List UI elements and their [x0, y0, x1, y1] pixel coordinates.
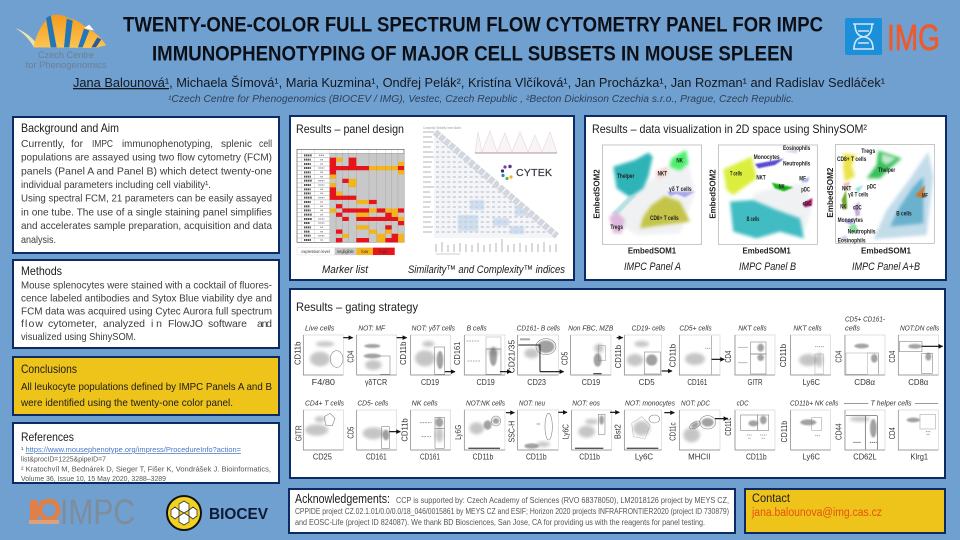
heading: background and aim: Background and Aim — [21, 121, 119, 135]
text: background: cell — [259, 138, 272, 150]
plot: NOT NK cells: Ly6G — [453, 425, 463, 440]
chart: IMPC Panel B: NK — [779, 184, 785, 191]
plot: CD4+ T cells: GITR — [293, 425, 303, 441]
chart: IMPC Panel B: Eosinophils — [783, 145, 811, 152]
logo: IMPC — [29, 493, 135, 532]
plot: NOT pDC: CD11c — [667, 422, 677, 441]
arrows: gating left half — [343, 338, 623, 432]
plot: NKT cells GITR: CD4 — [723, 350, 733, 363]
plot: cDC — [723, 399, 775, 462]
text: background: splenic — [221, 138, 252, 150]
text: background: for — [71, 138, 83, 150]
text: acknowledgements: and EOSC-Life (project ID 824087). We thank BD Biosciences, San Jose, CA for providing us with the reagents for panel testing. — [295, 518, 705, 527]
plot: NOT neu: NOT: neu — [519, 399, 545, 408]
text: background: analysis. — [21, 234, 56, 246]
plot: NOT monocytes — [613, 399, 675, 462]
plot: NOT eos: NOT: eos — [572, 399, 600, 408]
logo: Czech Centre for Phenogenomics: for Phenogenomics — [26, 60, 107, 70]
logo: Cytek: CYTEK — [516, 167, 552, 179]
plot: cDC: cDC — [737, 399, 749, 408]
plot: CD11b+ NK cells — [779, 399, 839, 462]
spectrum plot — [475, 131, 557, 153]
chart: IMPC Panel A+B: CD8+ T cells — [837, 156, 867, 163]
text: references: ² Kratochvíl M, Bednárek D, Sieger T, Fišer K, Vondrášek J. Bioinformatics, — [21, 464, 271, 474]
panel: conclusions — [13, 357, 279, 415]
plot: NKT cells Ly6C: CD11b — [778, 344, 788, 367]
panel: methods — [13, 260, 279, 348]
chart: IMPC Panel A+B — [836, 144, 934, 245]
heading: references: References — [21, 430, 74, 444]
heading: data visualization: Results – data visualization in 2D space using ShinySOM² — [592, 122, 867, 136]
panel: results gating strategy — [290, 289, 945, 478]
chart: IMPC Panel A+B: pDC — [867, 184, 877, 191]
axis labels: EmbedSOM: EmbedSOM1 — [742, 246, 791, 256]
plot: CD5- cells — [345, 399, 397, 462]
heading: contact: Contact — [752, 491, 791, 505]
plot: CD161- B cells: CD161- B cells — [517, 323, 560, 332]
plot: CD5+ CD161- cells: CD8α — [854, 377, 875, 387]
chart: IMPC Panel A+B: Eosinophils — [838, 238, 866, 245]
plot: NOT NK cells: NOT:NK cells — [466, 399, 505, 408]
plot: NK cells: CD11b — [400, 418, 410, 442]
plot: NOT monocytes: Ly6C — [635, 452, 653, 462]
plot: NOT gd T — [398, 323, 455, 387]
plot: CD5+ CD161- cells — [834, 315, 885, 387]
table legend: high — [379, 249, 388, 254]
plot: NOT DN cells: CD8α — [908, 377, 928, 387]
caption: marker list: Marker list — [322, 264, 369, 276]
axis labels: EmbedSOM: EmbedSOM2 — [708, 169, 718, 219]
plot: CD4+ T cells: CD4+ T cells — [305, 399, 344, 408]
text: methods: in — [151, 318, 162, 330]
panel: acknowledgements — [289, 489, 735, 533]
chart: IMPC Panel A+B: Thelper — [878, 167, 896, 174]
plot: CD4+ T cells: CD25 — [313, 452, 332, 462]
plot: NOT DN cells: CD4 — [887, 350, 897, 363]
plot: NOT eos — [560, 399, 612, 462]
plot: CD161- B cells — [506, 323, 560, 387]
text: methods: and — [257, 318, 272, 330]
axis labels: EmbedSOM: EmbedSOM1 — [861, 245, 911, 255]
text: background: immunophenotyping, — [122, 138, 213, 150]
panel: references — [13, 423, 279, 483]
plot: CD161- B cells: CD23 — [527, 377, 546, 387]
plot: CD11b+ NK cells: Ly6C — [803, 452, 820, 462]
caption: IMPC Panel A: IMPC Panel A — [624, 261, 681, 273]
title: TWENTY-ONE-COLOR FULL SPECTRUM FLOW CYTOMETRY PANEL FOR IMPC — [123, 14, 823, 36]
text: acknowledgements: CPPIDE project CZ.02.1.01/0.0/0.0/18_046/0015861 by MEYS CZ and ESIF; Horizon 2020 projects INFRAFRONTIER2020 (project ID 730879) — [295, 507, 729, 516]
heading: conclusions: Conclusions — [21, 362, 77, 376]
plot: cDC: CD11b — [746, 452, 767, 462]
chart: IMPC Panel B — [718, 145, 817, 244]
plot: NOT MF: γδTCR — [365, 377, 387, 387]
chart: IMPC Panel A: Thelper — [617, 173, 635, 180]
authors: Jana Balounová¹, Michaela Šímová¹, Maria Kuzmina¹, Ondřej Pelák², Kristína Vlčíková¹, Jan Procházka¹, Jan Rozman¹ and Radislav Sedláček¹ — [73, 75, 886, 90]
chart: IMPC Panel A: CD8+ T cells — [650, 215, 679, 222]
chart: IMPC Panel A+B: MF — [922, 193, 928, 200]
plot: CD4 vs Klrg1: CD4 — [887, 427, 897, 439]
text: background: populations are assayed using two flow cytometry (FCM) — [21, 152, 272, 164]
chart: marker list table — [297, 149, 404, 255]
plot: CD5+ cells: CD11b — [668, 344, 678, 367]
plot: CD19- cells: CD5 — [639, 377, 655, 387]
text: conclusions: All leukocyte populations defined by IMPC Panels A and B — [21, 381, 272, 393]
plot: NOT DN cells — [887, 323, 940, 387]
plot: NOT NK cells: CD11b — [473, 452, 494, 462]
chart: IMPC Panel A: Tregs — [610, 224, 623, 231]
axis labels: EmbedSOM: EmbedSOM2 — [592, 169, 602, 219]
heading: gating strategy: Results – gating strategy — [296, 300, 418, 314]
plot: NOT neu: CD11b — [526, 452, 547, 462]
logo: Czech Centre for Phenogenomics — [15, 15, 107, 70]
chart: IMPC Panel A+B: Neutrophils — [848, 228, 876, 235]
chart: IMPC Panel B: NKT — [756, 174, 766, 181]
panel: background and aim — [13, 117, 279, 253]
plot: B cells: B cells — [467, 323, 487, 332]
caption: IMPC Panel A+B: IMPC Panel A+B — [852, 261, 920, 273]
plot: NOT monocytes: Bst2 — [613, 424, 623, 439]
plot: NKT cells Ly6C — [778, 323, 831, 387]
heading: panel design: Results – panel design — [296, 122, 404, 136]
text: methods: flow — [21, 318, 43, 330]
text: background: in one tube. The use of a single staining panel simplifies — [21, 206, 272, 218]
text: contact email: jana.balounova@img.cas.cz — [751, 507, 882, 519]
caption: similarity and complexity: Similarity™ and Complexity™ indices — [408, 264, 565, 276]
plot: NK cells: CD161 — [420, 452, 440, 462]
plot: NOT eos: Ly6C — [560, 424, 570, 439]
plot: CD5+ cells: CD5+ cells — [679, 323, 712, 332]
plot: CD19- cells — [613, 323, 665, 387]
plot: NOT DN cells: NOT:DN cells — [900, 323, 940, 332]
text: background: Using spectral FCM, 21 parameters can be easily assayed — [21, 192, 272, 204]
table legend: low — [361, 249, 369, 254]
text: conclusions — [20, 381, 272, 409]
plot: CD19- cells: CD19- cells — [632, 323, 665, 332]
plot: NKT cells Ly6C: NKT cells — [793, 323, 822, 332]
heading: methods: Methods — [21, 264, 62, 278]
plot: CD44 vs CD62L — [834, 410, 885, 462]
logo: IMG: IMG — [887, 17, 940, 58]
plot: Non FBC MZB: CD19 — [582, 377, 600, 387]
chart: IMPC Panel B: pDC — [801, 186, 810, 193]
chart: IMPC Panel A+B: Monocytes — [838, 217, 863, 224]
plot: CD44 vs CD62L: CD44 — [834, 423, 844, 440]
plot: NOT monocytes: NOT: monocytes — [625, 399, 675, 408]
axis labels: EmbedSOM — [592, 167, 911, 256]
chart: IMPC Panel A+B: γδ T cells — [848, 191, 869, 198]
chart: IMPC Panel A: γδ T cells — [669, 186, 692, 193]
plot: NKT cells Ly6C: Ly6C — [803, 377, 820, 387]
title: IMMUNOPHENOTYPING OF MAJOR CELL SUBSETS IN MOUSE SPLEEN — [152, 42, 793, 66]
plot: NKT cells GITR: GITR — [747, 377, 762, 387]
plot: B cells: CD19 — [476, 377, 495, 387]
plot: CD5+ CD161- cells: CD5+ CD161- — [845, 315, 885, 324]
plot: NOT eos: CD11b — [579, 452, 600, 462]
logo: BIOCEV — [167, 496, 268, 530]
plot: B cells: CD161 — [452, 341, 462, 365]
text: references — [21, 445, 271, 483]
plot: CD44 vs CD62L: CD62L — [853, 452, 877, 462]
chart: IMPC Panel A+B: NK — [840, 204, 847, 211]
chart: IMPC Panel B: T cells — [730, 171, 742, 178]
plot: CD5- cells: CD5- cells — [357, 399, 389, 408]
text: methods: software — [208, 318, 247, 330]
text: acknowledgements — [295, 496, 729, 527]
affiliations: ¹Czech Centre for Phenogenomics (BIOCEV / IMG), Vestec, Czech Republic , ²Becton Dickinson Czechia s.r.o., Prague, Czech Republic. — [168, 94, 794, 105]
axis labels: EmbedSOM: EmbedSOM2 — [825, 167, 835, 218]
logo: IMPC: IMPC — [60, 493, 135, 532]
plot: CD5+ CD161- cells: CD4 — [834, 350, 844, 363]
heading: acknowledgements: Acknowledgements: — [295, 491, 390, 506]
chart: IMPC Panel A — [602, 145, 702, 244]
table legend: negligible — [337, 249, 354, 254]
chart: IMPC Panel A: NK — [676, 157, 683, 164]
text: background: panels (Panel A and Panel B) which detect twenty-one — [21, 166, 272, 178]
gating plots right half — [613, 315, 943, 462]
caption: IMPC Panel B: IMPC Panel B — [739, 261, 796, 273]
chart: IMPC Panel A+B: cDC — [853, 205, 862, 212]
logo: BIOCEV: BIOCEV — [209, 506, 268, 523]
table legend: expression level — [301, 249, 330, 254]
chart: similarity and complexity matrix: Complexity Similarity Index Matrix — [423, 126, 461, 130]
text: background: Currently, — [21, 138, 65, 150]
plot: Non FBC MZB — [560, 323, 613, 387]
label: T helper cells: T helper cells — [871, 399, 912, 408]
plot: NOT MF: CD4 — [345, 350, 355, 363]
text: references: list&procID=1225&pipeID=7 — [21, 454, 106, 464]
logo: IMG — [845, 17, 940, 58]
chart: IMPC Panel B: Monocytes — [754, 154, 780, 161]
text: methods: cytometer, — [48, 318, 97, 330]
text: background: and accelerates sample preparation, acquisition and data — [21, 220, 272, 232]
text: background — [21, 138, 272, 246]
plot: CD5- cells: CD161 — [366, 452, 387, 462]
chart: IMPC Panel B: MF — [799, 175, 806, 182]
panel: results panel design — [290, 116, 574, 280]
plot: CD5+ CD161- cells: cells — [845, 323, 860, 332]
plot: CD4+ T cells — [293, 399, 344, 462]
chart: IMPC Panel B: B cells — [747, 216, 760, 223]
logo: Czech Centre for Phenogenomics: Czech Centre — [38, 50, 94, 60]
axis labels: EmbedSOM: EmbedSOM1 — [628, 246, 676, 256]
plot: NOT NK cells — [453, 399, 505, 462]
plot: live cells: F4/80 — [312, 377, 335, 387]
plot: CD11b+ NK cells: CD11b — [779, 421, 789, 442]
text: methods: Mouse splenocytes were stained with a cocktail of fluores- — [21, 280, 272, 292]
panel: results data visualization — [585, 116, 946, 280]
text: background: IMPC — [92, 138, 113, 150]
chart: similarity and complexity matrix — [423, 126, 560, 255]
plot: NOT pDC — [667, 399, 720, 462]
chart: IMPC Panel A+B: NKT — [842, 185, 851, 192]
plot: CD5+ cells: CD161 — [687, 377, 708, 387]
plot: NOT neu — [506, 399, 558, 462]
plot: NOT MF — [345, 323, 397, 387]
plot: NOT gd T: CD19 — [421, 377, 439, 387]
plot: NOT gd T: CD11b — [398, 341, 408, 365]
text: references: ¹ https://www.mousephenotype.org/impress/ProcedureInfo?action= — [21, 445, 242, 454]
plot: CD11b+ NK cells: CD11b+ NK cells — [790, 399, 839, 408]
plot: live cells: Live cells — [305, 323, 335, 332]
chart: IMPC Panel B: Neutrophils — [783, 160, 811, 167]
arrows: gating right half — [662, 346, 943, 419]
plot: CD5- cells: CD5 — [345, 426, 355, 439]
plot: cDC: CD11c — [723, 417, 733, 436]
plot: CD4 vs Klrg1: Klrg1 — [910, 452, 928, 462]
label: T helper cells — [844, 399, 938, 408]
plot: NOT gd T: NOT: γδT cells — [412, 323, 455, 332]
text: methods — [21, 280, 272, 343]
plot: CD4 vs Klrg1 — [887, 410, 938, 462]
plot: NK cells: NK cells — [412, 399, 438, 408]
text: background: individual parameters including cell viability¹. — [21, 179, 211, 191]
text: acknowledgements: CCP is supported by: Czech Academy of Sciences (RVO 68378050), LM2018126 project by MEYS CZ, — [396, 496, 729, 505]
text: methods: cence labeled antibodies and Sytox Blue viability dye and — [21, 292, 272, 304]
plot: B cells — [452, 323, 505, 387]
plot: CD19- cells: CD11b — [613, 345, 623, 368]
plot: CD5+ cells — [668, 323, 720, 387]
plot: NOT MF: NOT: MF — [358, 323, 385, 332]
title — [123, 14, 823, 66]
plot: NOT neu: SSC-H — [506, 421, 516, 442]
chart: IMPC Panel A+B: B cells — [896, 210, 912, 217]
text: methods: FlowJO — [168, 318, 203, 330]
text: conclusions: were identified using the twenty-one color panel. — [20, 397, 233, 409]
plot: NOT pDC: NOT: pDC — [681, 399, 711, 408]
plot: live cells: CD11b — [293, 341, 303, 365]
panel: contact — [745, 489, 945, 533]
plot: live cells — [293, 323, 343, 387]
chart: IMPC Panel A: NKT — [658, 171, 667, 178]
text: references: Volume 36, Issue 10, 15 May 2020, 3288–3289 — [21, 474, 166, 483]
plot: NOT pDC: MHCII — [688, 452, 710, 462]
chart: IMPC Panel A+B: Tregs — [861, 148, 876, 155]
plot: NKT cells GITR: NKT cells — [738, 323, 767, 332]
plot: NKT cells GITR — [723, 323, 775, 387]
text: methods: FCM data was acquired using Cytec Aurora full spectrum — [21, 306, 272, 318]
plot: CD161- B cells: CD21/35 — [506, 340, 516, 373]
plot: NK cells — [400, 399, 451, 462]
table legend — [297, 248, 395, 255]
text: methods: visualized using ShinySOM. — [21, 331, 136, 343]
gating plots left half — [293, 323, 623, 462]
chart: IMPC Panel B: cDC — [803, 201, 812, 208]
plot: Non FBC MZB: Non FBC, MZB — [568, 323, 613, 332]
text: methods: analyzed — [103, 318, 145, 330]
plot: Non FBC MZB: CD5 — [560, 351, 570, 365]
